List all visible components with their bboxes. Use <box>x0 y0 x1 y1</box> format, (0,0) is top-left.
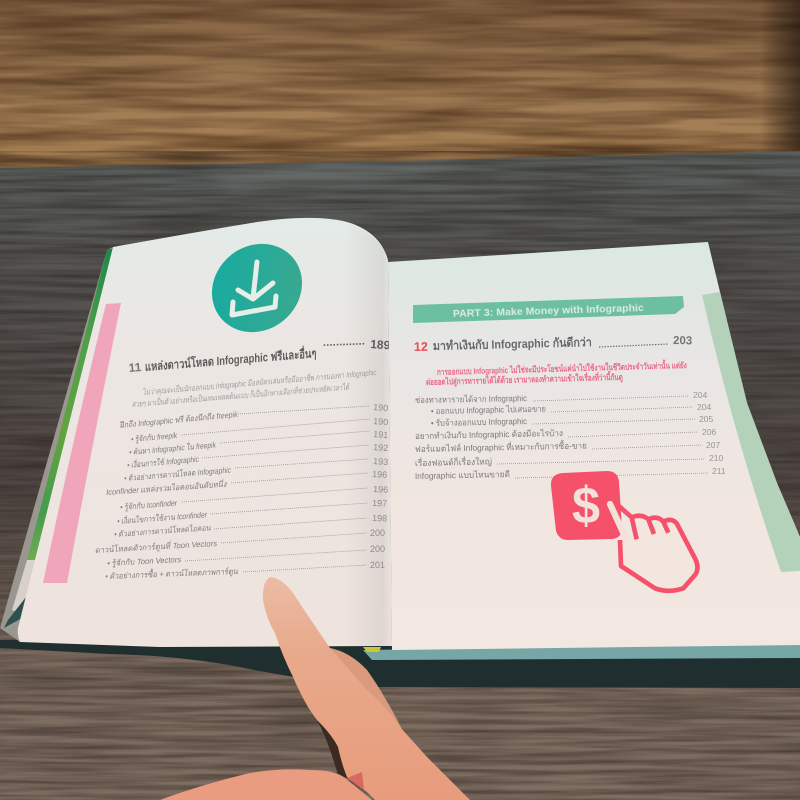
chapter 11 dotted leaders <box>182 406 370 572</box>
red patch between fingers <box>347 772 364 790</box>
back finger <box>320 648 405 760</box>
chapter 11 contents list: • ค้นหา Infographic ใน freepik <box>129 440 217 457</box>
shadow beside finger <box>317 720 348 778</box>
chapter 11 page numbers: 190 <box>373 402 389 413</box>
yellow page marker <box>363 647 381 652</box>
pink side strip <box>43 303 121 583</box>
part 3 banner: PART 3: Make Money with Infographic <box>453 302 644 320</box>
chapter 11 page numbers: 196 <box>372 469 387 480</box>
chapter 11 heading: แหล่งดาวน์โหลด Infographic ฟรีและอื่นๆ <box>145 344 316 374</box>
chapter 12 page numbers: 211 <box>712 466 726 476</box>
chapter 11 contents list: • ตัวอย่างการดาวน์โหลดไอคอน <box>114 522 212 539</box>
chapter 12 contents list: อยากทำเงินกับ Infographic ต้องมีอะไรบ้าง <box>415 428 563 441</box>
chapter 12 heading: มาทำเงินกับ Infographic กันดีกว่า <box>433 335 592 353</box>
left page <box>18 218 392 647</box>
chapter 11 contents list: ฝึกถึง Infographic ฟรี ต้องนึกถึง freepik <box>119 410 239 430</box>
chapter 11 page numbers: 198 <box>372 513 387 524</box>
chapter 12 description: การออกแบบ Infographic ไม่ใช่จะมีประโยชน์แค่นำไปใช้งานในชีวิตประจำวันเท่านั้น แต่ยัง <box>437 358 687 377</box>
index finger <box>263 577 470 800</box>
dollar button <box>551 471 622 540</box>
chapter 12 heading: 203 <box>673 335 692 347</box>
chapter 11 contents list: ดาวน์โหลดตัวการ์ตูนที่ Toon Vectors <box>95 537 218 556</box>
chapter 11 page numbers: 192 <box>373 442 389 453</box>
chapter 12 contents list: เรื่องฟอนต์ก็เรื่องใหญ่ <box>415 455 492 468</box>
chapter 11 page numbers: 200 <box>370 528 385 538</box>
chapter 11 page numbers: 196 <box>373 484 388 495</box>
hand outline <box>610 502 697 591</box>
chapter 12 page numbers: 206 <box>702 427 716 437</box>
chapter 11 contents list: • รู้จักกับ Toon Vectors <box>107 555 182 569</box>
chapter 12 heading <box>414 335 692 354</box>
icon: download circle <box>194 226 320 350</box>
chapter 12 heading: 12 <box>414 340 428 354</box>
chapter 11 page numbers: 197 <box>372 498 387 509</box>
chapter 11 page numbers: 193 <box>373 456 389 467</box>
chapter 11 heading: 11 <box>128 360 142 375</box>
chapter 11 heading: ............. <box>323 336 365 349</box>
icon: hand pressing dollar button <box>551 471 697 591</box>
chapter 12 description <box>426 358 687 388</box>
chapter 12 contents list: • ออกแบบ Infographic ไปเสนอขาย <box>431 404 546 416</box>
chapter 12 page numbers: 207 <box>706 440 720 450</box>
chapter 11 heading: 189 <box>370 337 391 352</box>
chapter 12 contents list <box>415 393 587 481</box>
chapter 11 page numbers: 190 <box>373 416 389 427</box>
chapter 12 page numbers: 210 <box>709 453 723 463</box>
chapter 12 page numbers <box>693 390 726 476</box>
chapter 12 contents list: ช่องทางหารายได้จาก Infographic <box>415 393 528 405</box>
chapter 12 page numbers: 205 <box>699 414 713 424</box>
book cover shadow band <box>0 640 800 688</box>
chapter 11 contents list: Iconfinder แหล่งรวมไอคอนอันดับหนึ่ง <box>106 478 228 497</box>
background: wooden wall <box>0 0 800 172</box>
chapter 11 page numbers <box>370 402 389 570</box>
icon: hand pressing dollar button: $ <box>572 477 600 535</box>
chapter 11 heading <box>128 336 391 375</box>
chapter 12 description: ต่อยอดไปสู่การหารายได้ได้ด้วย เรามาลองทำความเข้าใจเรื่องที่ว่านี้กันดู <box>426 370 623 388</box>
chapter 11 contents list: • ตัวอย่างการดาวน์โหลด Infographic <box>124 465 231 483</box>
hand: pointing finger and thumb <box>160 577 470 800</box>
thumb and hand base <box>160 769 372 800</box>
chapter 11 contents list: • เงื่อนไขการใช้งาน Iconfinder <box>117 508 208 526</box>
chapter 11 contents list <box>95 410 240 582</box>
chapter 11 contents list: • รู้จักกับ freepik <box>131 431 178 445</box>
part 3 banner <box>413 296 684 323</box>
right page <box>388 242 800 650</box>
chapter 12 page numbers: 204 <box>697 402 711 412</box>
chapter 11 page numbers: 200 <box>370 544 385 554</box>
chapter 11 description: สวยๆ มาเป็นตัวอย่างหรือเป็นเทมเพลตต้นแบบ ก็เป็นอีกทางเลือกที่ช่วยประหยัดเวลาได้ <box>132 380 350 409</box>
chapter 11 page numbers: 201 <box>370 560 385 570</box>
chapter 12 contents list: ฟอร์แมตไฟล์ Infographic ที่เหมาะกับการซื้อ-ขาย <box>415 439 587 454</box>
chapter 12 page numbers: 204 <box>693 390 707 400</box>
spine shading <box>345 222 392 646</box>
book: cover edge and under-pages at left <box>0 247 113 642</box>
chapter 12 contents list: Infographic แบบไหนขายดี <box>415 469 510 481</box>
chapter 11 page numbers: 191 <box>373 429 389 440</box>
chapter 11 contents list: • เงื่อนการใช้ Infographic <box>127 453 200 470</box>
chapter 12 dotted leaders <box>497 396 708 478</box>
chapter 11 description: ไม่ว่าคุณจะเป็นนักออกแบบ Infographic มือสมัครเล่นหรือมืออาชีพ การมองหา Infographic <box>142 367 377 397</box>
book: teal cover edge at bottom right <box>363 644 800 660</box>
chapter 11 contents list: • รู้จักกับ Iconfinder <box>120 498 178 513</box>
chapter 11 contents list: • ตัวอย่างการซื้อ + ดาวน์โหลดภาพการ์ตูน <box>105 564 240 582</box>
green side strip <box>702 292 800 572</box>
chapter 11 description <box>132 367 377 409</box>
chapter 12 contents list: • รับจ้างออกแบบ Infographic <box>431 416 528 428</box>
